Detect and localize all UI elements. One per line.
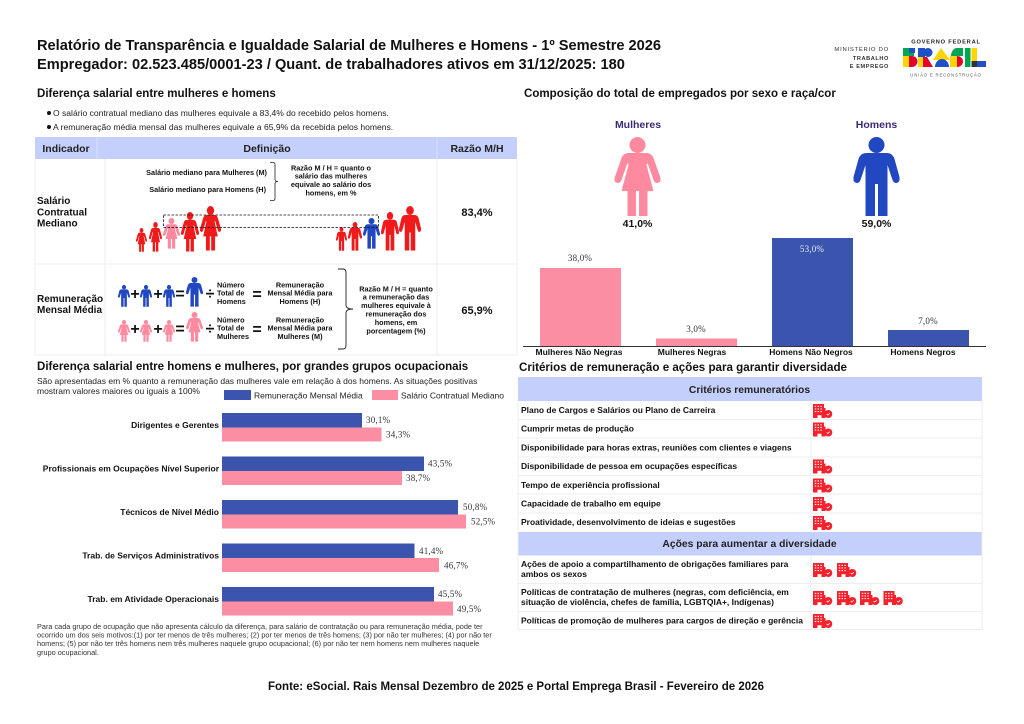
bar chart: composition: Homens Não Negros (769, 347, 853, 357)
group: técnicos (120, 500, 496, 528)
table header: Definição (243, 143, 291, 155)
ratio values: 65,9% (461, 305, 493, 317)
definition: median salary text: Salário mediano para Homens (H) (149, 185, 267, 194)
table headings: Ações para aumentar a diversidade (662, 539, 837, 550)
table headings (662, 385, 837, 550)
formula: women: + (153, 321, 163, 338)
bracket with explanation: porcentagem (%) (366, 326, 426, 336)
row labels: Remuneração (37, 294, 103, 305)
icon: mulheres (614, 119, 661, 230)
action rows: Políticas de contratação de mulheres (negras, com deficiência, em (521, 587, 789, 597)
formula: women: Mensal Média para (268, 324, 333, 332)
footnote: Para cada grupo de ocupação que não apresenta cálculo da diferença, para salário de contratação ou para remuneração média, pode ter (37, 622, 483, 631)
bar chart: composition: 38,0% (568, 253, 592, 263)
bullets: O salário contratual mediano das mulheres equivale a 83,4% do recebido pelos homens. (53, 108, 389, 118)
table header: Indicador (42, 143, 90, 155)
logo: Ministério do Trabalho e Emprego: MINISTÉRIO DO (834, 46, 889, 53)
heading: diferença salarial: Diferença salarial entre mulheres e homens (37, 88, 276, 100)
formula: women: Remuneração (276, 316, 325, 324)
heading: composição: Composição do total de empregados por sexo e raça/cor (524, 88, 836, 100)
group: dirigentes: Dirigentes e Gerentes (131, 420, 219, 430)
formula: men: Total de (217, 288, 244, 298)
title: Relatório de Transparência e Igualdade Salarial de Mulheres e Homens - 1º Semestre 2026 (37, 38, 661, 54)
group: profissionais: 38,7% (406, 473, 431, 483)
group: técnicos: 52,5% (471, 516, 496, 526)
criteria rows: Cumprir metas de produção (521, 424, 634, 434)
definition: median salary text: Razão M / H = quanto o (291, 164, 372, 172)
row labels: Mediano (37, 218, 78, 230)
pictogram: men median (336, 206, 421, 251)
formula: men: + (153, 286, 163, 303)
bracket with explanation: a remuneração das (363, 292, 429, 302)
logo: Ministério do Trabalho e Emprego (834, 46, 889, 70)
formula: women: Número (217, 316, 245, 324)
legend: Remuneração Mensal Média (254, 390, 363, 400)
group: serviços administrativos: 46,7% (444, 560, 469, 570)
chart subtitle: São apresentadas em % quanto a remuneração das mulheres vale em relação à dos homens. As situações positivas (37, 376, 477, 386)
bar chart: composition: 7,0% (918, 316, 938, 326)
formula: men: Número (217, 280, 245, 290)
table header (42, 143, 504, 155)
group: atividade operacional: Trab. em Atividade Operacionais (88, 594, 219, 604)
group: dirigentes (131, 413, 411, 442)
group: serviços administrativos (82, 544, 469, 572)
bar chart: occupational groups (43, 413, 496, 616)
criteria rows: Disponibilidade de pessoa em ocupações específicas (521, 461, 737, 471)
definition: median salary text (146, 162, 372, 200)
footnote: ocorrido um dos seis motivos:(1) por ter menos de três mulheres; (2) por ter menos de três homens; (3) por não ter mulheres; (4) por não ter (37, 630, 492, 640)
title: Empregador: 02.523.485/0001-23 / Quant. de trabalhadores ativos em 31/12/2025: 180 (37, 57, 625, 73)
logo: Governo Federal Brasil (903, 40, 986, 78)
formula: men: + (130, 286, 140, 303)
chart subtitle (37, 376, 477, 396)
logo: Ministério do Trabalho e Emprego: E EMPREGO (850, 64, 889, 70)
action rows: Políticas de promoção de mulheres para cargos de direção e gerência (521, 616, 803, 626)
bracket with explanation (338, 269, 433, 349)
table headings: Critérios remuneratórios (689, 385, 810, 396)
legend (224, 390, 504, 400)
formula: men: Homens (H) (280, 297, 321, 306)
bar chart: composition: Mulheres Não Negras (536, 347, 623, 357)
bar chart: composition: 3,0% (686, 324, 706, 334)
bullets (47, 108, 393, 132)
chart subtitle: mostram valores maiores ou iguais a 100% (37, 386, 200, 396)
row labels (37, 196, 103, 316)
criteria rows (521, 405, 792, 527)
table header: Razão M/H (450, 143, 504, 155)
panel: indicator table (35, 137, 517, 355)
group: atividade operacional: 49,5% (457, 604, 482, 614)
source: Fonte: eSocial. Rais Mensal Dezembro de 2025 e Portal Emprega Brasil - Fevereiro de 2026 (268, 681, 764, 693)
title (37, 38, 661, 73)
formula: women: ÷ (206, 321, 215, 338)
group: atividade operacional (88, 587, 482, 616)
ratio values (461, 207, 493, 317)
formula: men: Mensal Média para (268, 288, 333, 298)
criteria rows: Proatividade, desenvolvimento de ideias e sugestões (521, 517, 736, 527)
criteria rows: Plano de Cargos e Salários ou Plano de Carreira (521, 405, 716, 415)
group: profissionais (43, 456, 453, 485)
panel: criteria table (518, 377, 982, 630)
bar chart: composition: Mulheres Negras (658, 347, 727, 357)
row labels: Salário (37, 196, 70, 207)
formula: women: Total de (217, 324, 244, 332)
formula: men (118, 277, 333, 307)
icon: mulheres: 41,0% (623, 218, 653, 230)
group: dirigentes: 34,3% (386, 430, 411, 440)
icon: mulheres: Mulheres (615, 119, 661, 131)
footnote: grupo ocupacional. (37, 648, 99, 657)
logo: Governo Federal Brasil: UNIÃO E RECONSTRUÇÃO (910, 72, 982, 78)
logo: Ministério do Trabalho e Emprego: TRABALHO (853, 56, 889, 62)
icon: homens: Homens (856, 119, 897, 131)
criteria rows: Disponibilidade para horas extras, reuniões com clientes e viagens (521, 442, 792, 452)
formula: women: Mulheres (217, 332, 249, 341)
bar chart: composition: Homens Negros (890, 347, 956, 357)
action rows: Ações de apoio a compartilhamento de obrigações familiares para (521, 559, 789, 569)
definition: median salary text: Salário mediano para Mulheres (M) (146, 168, 268, 177)
bracket with explanation: mulheres equivale à (361, 301, 432, 310)
legend: Salário Contratual Mediano (401, 390, 504, 400)
formula: men: = (175, 286, 185, 303)
formula: women: = (252, 322, 262, 338)
formula: women: Mulheres (M) (278, 332, 323, 341)
formula: men: Homens (217, 297, 246, 306)
heading: diferença por grupos: Diferença salarial entre homens e mulheres, por grandes grupos ocupacionais (37, 361, 468, 373)
definition: median salary text: homens, em % (305, 188, 357, 198)
formula: men: ÷ (206, 286, 215, 303)
group: profissionais: 43,5% (428, 458, 453, 468)
action rows: ambos os sexos (521, 569, 587, 579)
row labels: Contratual (37, 208, 87, 218)
action rows: situação de violência, chefes de família, LGBTQIA+, Indígenas) (521, 597, 774, 607)
action rows (521, 559, 803, 626)
bracket with explanation: Razão M / H = quanto (359, 284, 433, 294)
heading: critérios: Critérios de remuneração e ações para garantir diversidade (519, 361, 848, 374)
criteria rows: Tempo de experiência profissional (521, 480, 660, 490)
formula: women (118, 312, 333, 342)
ratio values: 83,4% (461, 207, 493, 219)
icons: criteria (813, 404, 832, 530)
formula: women: + (130, 321, 140, 338)
icon: homens (853, 119, 900, 230)
icon: homens: 59,0% (862, 218, 892, 230)
logo: Governo Federal Brasil: GOVERNO FEDERAL (911, 40, 981, 46)
formula: men: Remuneração (276, 280, 325, 290)
bracket with explanation: remuneração dos (366, 310, 426, 318)
group: profissionais: Profissionais em Ocupações Nível Superior (43, 464, 220, 474)
bullets: A remuneração média mensal das mulheres equivale a 65,9% da recebida pelos homens. (53, 122, 393, 132)
group: atividade operacional: 45,5% (438, 589, 463, 599)
definition: median salary text: salário das mulheres (295, 172, 367, 180)
pictogram: women median (136, 206, 221, 252)
icons: actions (813, 563, 903, 628)
group: serviços administrativos: 41,4% (419, 546, 444, 556)
bar chart: composition (523, 238, 986, 357)
footnote (37, 622, 492, 657)
row labels: Mensal Média (37, 305, 102, 316)
group: serviços administrativos: Trab. de Serviços Administrativos (82, 550, 219, 560)
group: técnicos: 50,8% (463, 502, 488, 512)
group: dirigentes: 30,1% (366, 415, 391, 425)
group: técnicos: Técnicos de Nível Médio (120, 507, 219, 517)
footnote: homens; (5) por não ter três homens nem três mulheres naquele grupo ocupacional; (6) por não ter nem homens nem mulheres naquele (37, 639, 479, 648)
formula: women: = (175, 321, 185, 338)
bar chart: composition: 53,0% (800, 244, 824, 254)
bracket with explanation: homens, em (375, 318, 418, 327)
criteria rows: Capacidade de trabalho em equipe (521, 498, 661, 508)
formula: men: = (252, 286, 262, 304)
definition: median salary text: equivale ao salário dos (291, 180, 371, 189)
